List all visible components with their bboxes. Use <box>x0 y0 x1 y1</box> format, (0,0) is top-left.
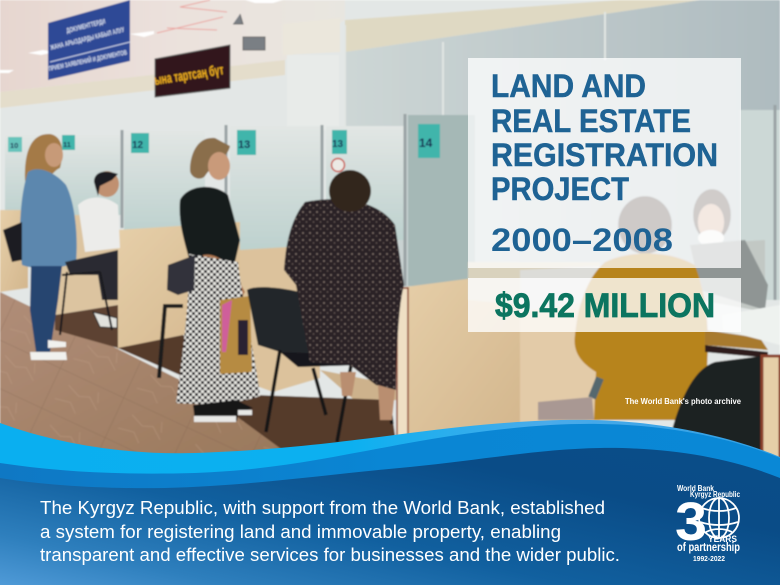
logo: World Bank 30 years: 3 <box>675 492 707 552</box>
photo credit: The World Bank's photo archive <box>625 397 742 406</box>
upper wall <box>0 0 780 460</box>
logo: World Bank 30 years: World Bank <box>677 484 714 493</box>
red ceiling reflections <box>157 0 227 33</box>
ceiling light <box>0 0 283 73</box>
pillar <box>283 18 340 55</box>
floor <box>0 292 400 470</box>
wall dividers <box>345 12 605 128</box>
booth number signs: 10 <box>10 141 18 150</box>
seated woman in floral dress <box>284 170 404 420</box>
logo: World Bank 30 years: YEARS <box>708 534 737 545</box>
blue sign <box>48 0 130 80</box>
seated man in white shirt <box>60 171 120 335</box>
frosted glass partitions <box>5 110 780 300</box>
right wood booth <box>762 356 780 460</box>
booth number signs <box>8 124 440 158</box>
icon: globe <box>699 498 739 538</box>
booth number signs: 13 <box>238 139 250 151</box>
dark counter edge <box>705 345 768 358</box>
wave: dark footer band <box>0 448 780 585</box>
amount panel <box>468 278 741 332</box>
counter window objects behind panel <box>468 240 765 312</box>
wave: top light band <box>0 420 780 585</box>
description text <box>40 497 620 565</box>
blue sign: ДОКУМЕНТТЕРДИ <box>66 18 106 35</box>
title text: LAND AND <box>491 68 646 104</box>
title text: REGISTRATION <box>491 137 718 173</box>
woman in black top and houndstooth skirt <box>159 138 260 422</box>
pillar shaft <box>287 55 339 130</box>
black office chair <box>247 287 392 442</box>
logo: World Bank 30 years: of partnership <box>677 542 740 554</box>
project dates: 2000–2008 <box>491 222 673 258</box>
black chair foreground <box>665 356 762 460</box>
title text: PROJECT <box>491 171 629 207</box>
logo: World Bank 30 years <box>675 484 740 563</box>
title text <box>491 68 718 207</box>
wood booths <box>0 210 600 437</box>
logo: World Bank 30 years: 1992-2022 <box>693 554 725 563</box>
blue sign: ЖАНА АРЫЗДАРДЫ КАБЫЛ АЛУУ <box>49 27 126 52</box>
LED sign: ына тартсаң бүт <box>153 61 225 88</box>
right glass wall <box>345 0 780 300</box>
description text: transparent and effective services for businesses and the wider public. <box>40 544 620 565</box>
ceiling <box>0 0 345 92</box>
booth number signs: 11 <box>63 140 71 149</box>
white counter <box>722 305 780 345</box>
description text: The Kyrgyz Republic, with support from the World Bank, established <box>40 497 605 518</box>
woman with mask behind counter <box>690 189 768 310</box>
logo: World Bank 30 years: Kyrgyz Republic <box>690 490 740 499</box>
partition posts <box>122 105 775 300</box>
project amount: $9.42 MILLION <box>495 287 715 325</box>
title panel <box>468 58 741 268</box>
beige bulkhead left <box>0 60 285 108</box>
LED sign <box>153 45 230 97</box>
title text: REAL ESTATE <box>491 103 691 139</box>
booth number signs: 12 <box>132 140 144 151</box>
beige bulkhead right <box>345 0 700 52</box>
booth number signs: 13 <box>332 139 344 150</box>
no-sign on glass <box>332 158 344 172</box>
woman in denim jacket <box>3 134 77 360</box>
wave: middle band <box>0 424 780 585</box>
description text: a system for registering land and immovable property, enabling <box>40 521 561 542</box>
booth number signs: 14 <box>419 136 433 150</box>
blue sign: ПРИЕМ ЗАЯВЛЕНИЙ И ДОКУМЕНТОВ <box>48 48 128 73</box>
security camera <box>233 14 265 50</box>
person in yellow hoodie <box>538 196 768 420</box>
